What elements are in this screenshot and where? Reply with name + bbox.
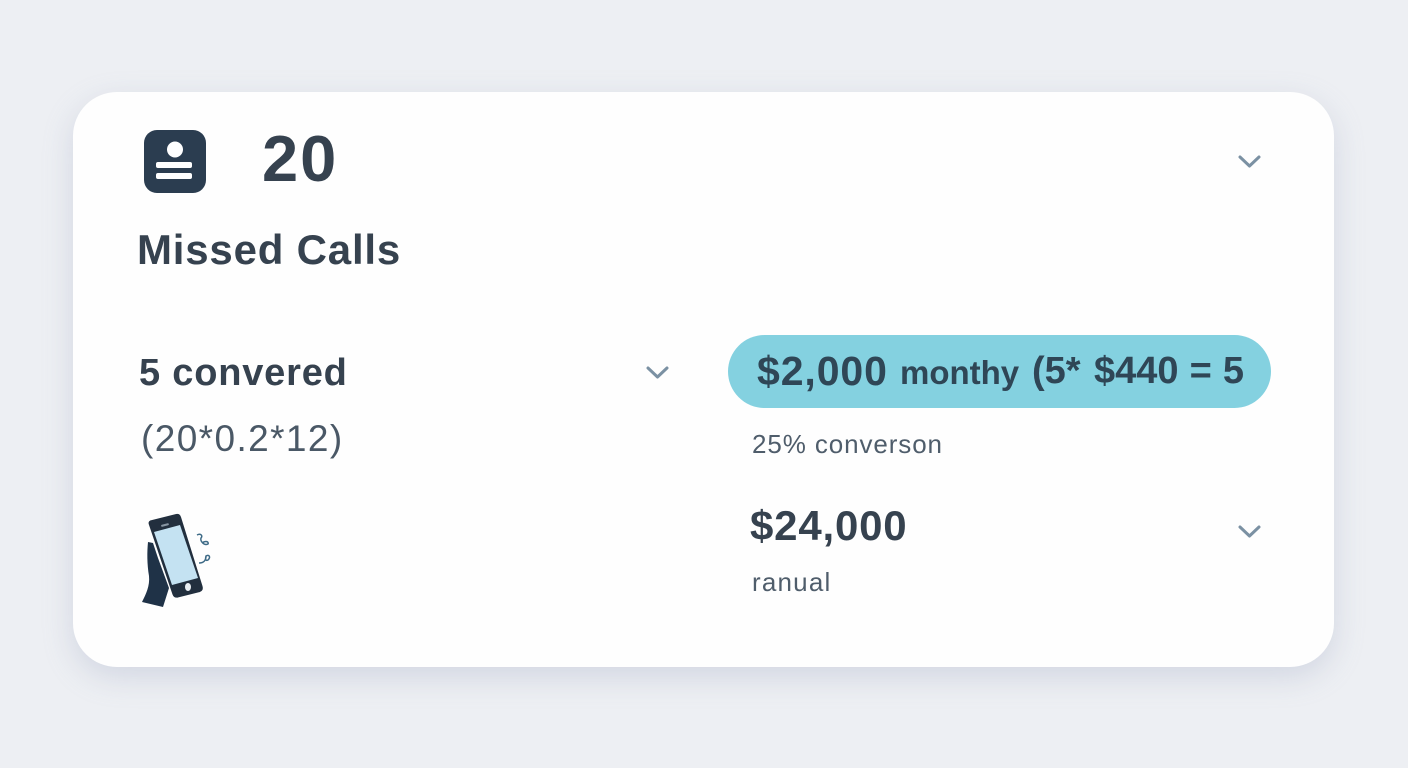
pill: monthly revenue (728, 335, 1271, 408)
pill text part: amount: $2,000 (757, 348, 888, 394)
text: annual label: ranual (752, 567, 831, 597)
pill text part: formula: (5* (1032, 350, 1081, 392)
icon: contact badge (144, 130, 206, 193)
text: conversion formula: (20*0.2*12) (141, 418, 344, 459)
stat: annual total: $24,000 (750, 502, 907, 549)
text: converted calls: 5 convered (139, 352, 348, 394)
panel: missed calls card (73, 92, 1334, 667)
text: conversion rate: 25% converson (752, 429, 943, 459)
icon: chevron converted (646, 366, 669, 379)
pill text part: monthly: monthy (900, 354, 1019, 391)
icon: chevron top (1238, 155, 1261, 168)
pill text part: price: $440 = 5 (1094, 350, 1244, 392)
icon: chevron annual (1238, 525, 1261, 538)
stat: missed call count: 20 (262, 122, 338, 195)
icon: hand holding phone (142, 514, 210, 607)
heading: missed calls: Missed Calls (137, 226, 401, 273)
